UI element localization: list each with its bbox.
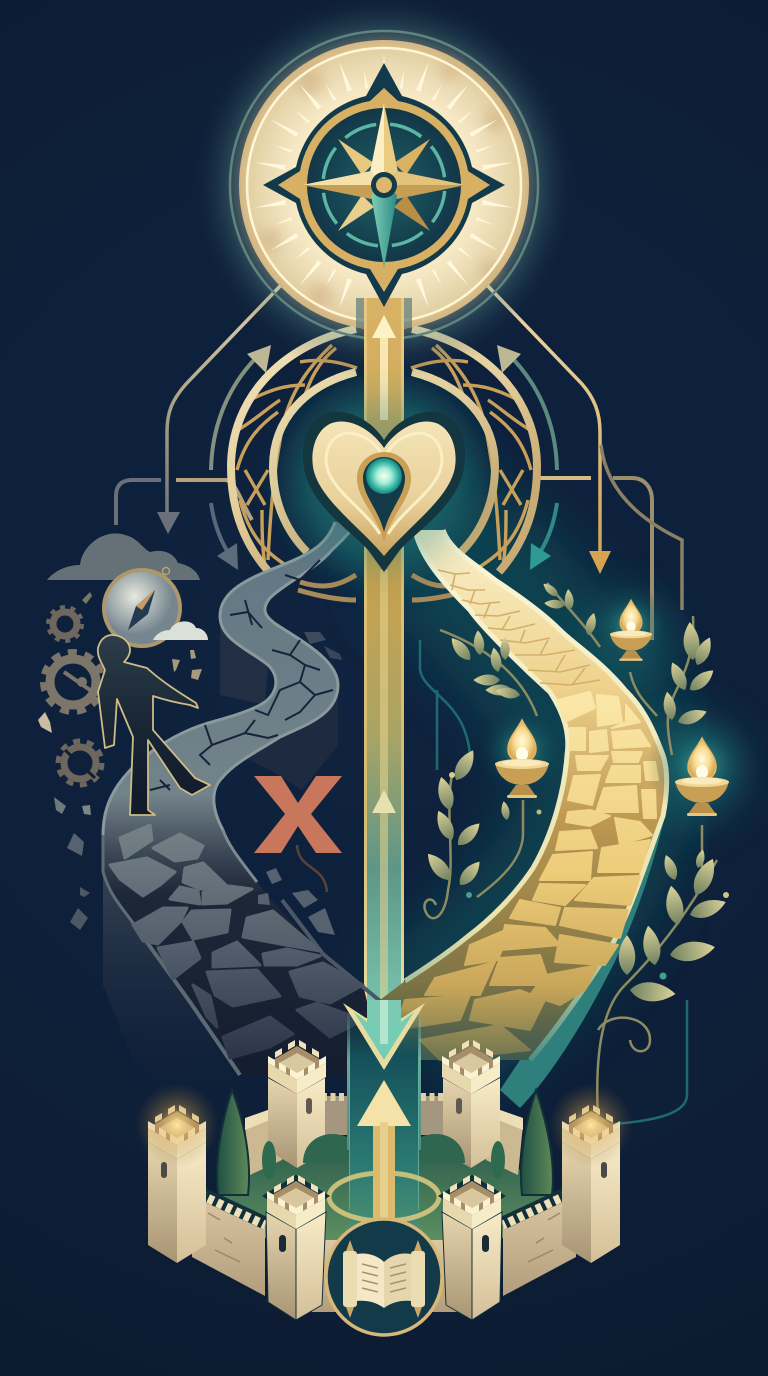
front tower right [438, 1175, 506, 1320]
rising arrow [357, 1080, 411, 1232]
back tower left [268, 1040, 326, 1168]
lattice left [237, 345, 357, 572]
glowing orb [366, 458, 402, 494]
golden cobblestones [395, 692, 658, 1060]
heart inner swirl [326, 433, 442, 534]
right connector [540, 445, 682, 640]
inner dial [307, 108, 461, 262]
heart body [312, 422, 456, 556]
open pages [357, 1253, 411, 1308]
storm cloud [47, 533, 200, 580]
gears [43, 607, 103, 785]
scroll right [411, 1240, 425, 1318]
heart outline [303, 412, 465, 572]
teal threads [420, 640, 687, 1125]
citadel [135, 1000, 633, 1335]
right side arrow up [497, 345, 557, 470]
lost figure [98, 635, 210, 815]
compass hub [371, 172, 397, 198]
tower glows [135, 1083, 633, 1167]
gate wall [312, 1240, 457, 1312]
lower lattice under heart [298, 575, 470, 600]
parchment mottling [258, 60, 507, 307]
golden ring [329, 1173, 439, 1221]
dark spiked backing [263, 63, 505, 307]
inner arc right [412, 372, 495, 552]
heart core seed [357, 452, 411, 542]
cracked grey road [103, 522, 385, 1075]
lamp middle [495, 720, 549, 798]
broken stones of lower road [110, 825, 363, 1058]
left side arrow up [211, 345, 271, 470]
feedback lines from compass [116, 281, 682, 640]
golden road side edge [500, 820, 664, 1108]
compass halo [189, 0, 579, 380]
broken pocket compass [104, 568, 208, 646]
ground [215, 1150, 553, 1240]
large gear [43, 652, 103, 712]
lower gear [58, 741, 102, 785]
outer arc left [231, 329, 356, 572]
mid up arrow [372, 790, 396, 813]
dots [449, 772, 729, 980]
bushes [303, 1134, 465, 1163]
top up arrow [372, 315, 396, 420]
cypress left [217, 1090, 249, 1195]
front wall right [503, 1188, 578, 1296]
cypress right [521, 1090, 553, 1195]
oil lamps [495, 600, 729, 816]
x mark [254, 776, 342, 853]
branches and vines [420, 583, 717, 1125]
leaves [423, 581, 728, 1003]
teal ring segments [323, 124, 445, 246]
left side arrow down [211, 503, 238, 570]
main cardinal star [302, 103, 466, 268]
right side arrow down [530, 503, 557, 570]
brown wire [297, 845, 327, 892]
small gear [48, 607, 82, 641]
small cloud [153, 621, 208, 640]
cracked road cliffs [103, 616, 338, 1120]
road cracks [150, 560, 333, 790]
parchment disc [239, 40, 529, 330]
thin outer ring [230, 31, 538, 339]
road edges [103, 522, 385, 1075]
watch needle [128, 590, 155, 630]
inner arc left [273, 372, 356, 552]
parchment inner ring [247, 48, 521, 322]
debris [38, 592, 342, 935]
centre strip [380, 570, 388, 1010]
heart glow [299, 400, 469, 570]
central vertical bar [356, 298, 412, 1020]
diagonal points [338, 139, 430, 231]
lamp far right [675, 738, 729, 816]
small cypress pair [262, 1141, 505, 1179]
compass medallion [230, 31, 538, 339]
beam of light [349, 1010, 419, 1240]
sun rays [255, 54, 513, 309]
upper cobble joints [438, 570, 600, 685]
gold ring with points [278, 88, 490, 292]
left descending arrow [157, 281, 285, 534]
back tower right [442, 1040, 500, 1168]
lower arrow head [343, 1000, 425, 1070]
outer arc right [412, 329, 537, 572]
back walls [245, 1096, 523, 1175]
book medallion [326, 1219, 442, 1335]
right descending arrow [483, 281, 611, 574]
lamp upper right [610, 600, 652, 661]
left connector [116, 480, 252, 525]
teal glow around paths [292, 388, 745, 1030]
compass rose [263, 63, 505, 307]
far left lit tower [148, 1105, 206, 1263]
front wall left [190, 1188, 265, 1296]
golden road [380, 530, 667, 1060]
front tower left [262, 1175, 330, 1320]
heart [299, 400, 469, 572]
lamp stems [477, 800, 523, 897]
lamp glows [477, 585, 757, 820]
scroll left [343, 1240, 357, 1318]
beam lines [347, 1010, 421, 1210]
far right lit tower [562, 1105, 620, 1263]
golden road rims [405, 530, 667, 1060]
branch stems [547, 583, 600, 647]
celtic knot arcs [231, 329, 537, 600]
lattice right [411, 345, 531, 572]
